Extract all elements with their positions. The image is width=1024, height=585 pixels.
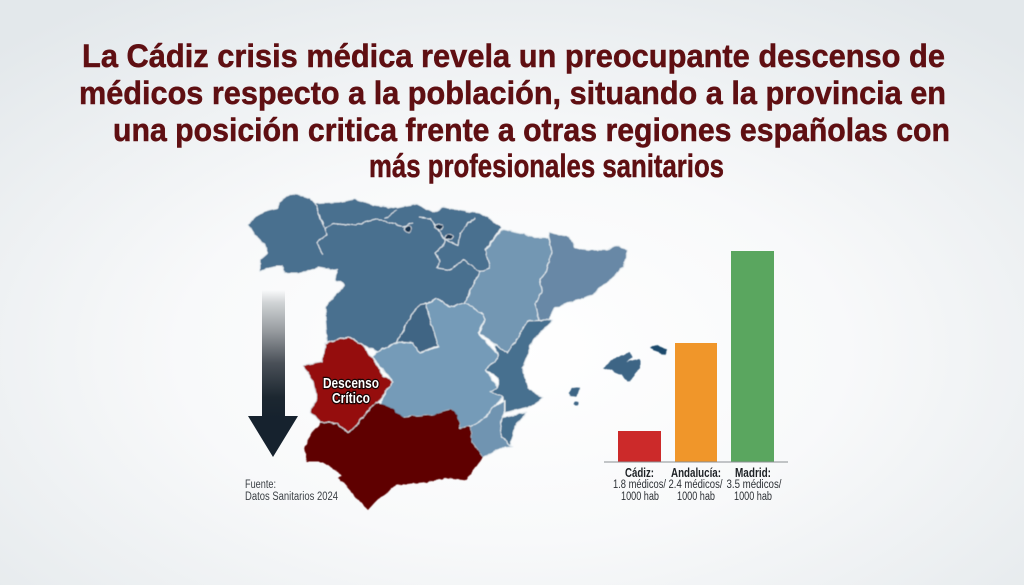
enclave: Álava west [435,224,443,230]
internal borders of the north [315,203,480,272]
label: Andalucía: Andalucía: [671,466,721,480]
label: Andalucía [668,466,723,503]
source note: Datos Sanitarios 2024 [245,491,338,503]
label: Cádiz [613,466,667,503]
title: La Cádiz crisis médica revela un preocupante descenso de [82,38,945,74]
region: Aragón [465,229,552,353]
label: Madrid [726,466,782,503]
small dark enclaves [404,224,454,240]
label: Cádiz: 1.8 médicos/ [613,479,667,491]
map label: Descenso Crítico [323,376,379,407]
region: northern peninsula [248,194,502,352]
arrow: descent [248,290,298,457]
label: Andalucía: 2.4 médicos/ [668,479,723,491]
bar: Cádiz [618,431,661,462]
region: Castilla-La Mancha [372,298,503,428]
islands [568,344,667,406]
baseline [604,462,788,463]
map label: Descenso Crítico: Crítico [332,391,370,407]
region: Valencia [485,320,553,413]
bar: Madrid [731,251,774,462]
label: Cádiz: 1000 hab [621,491,659,503]
label: Andalucía: 1000 hab [677,491,715,503]
label: Madrid: 1000 hab [734,491,772,503]
island: Menorca [650,344,667,356]
region: Cataluña [535,232,628,322]
title: médicos respecto a la población, situando a la provincia en [79,75,946,111]
title: más profesionales sanitarios [369,148,724,184]
source note [245,479,338,503]
bar chart [604,251,788,503]
label: Madrid: Madrid: [735,466,771,480]
region: Extremadura [303,337,393,433]
title [79,38,950,184]
enclave: Álava east [444,234,454,240]
enclave: Treviño [404,226,412,232]
region: Alicante [500,412,527,445]
island: Mallorca [603,352,640,381]
label: Cádiz: Cádiz: [625,466,654,480]
title: una posición critica frente a otras regiones españolas con [113,112,950,148]
source note: Fuente: [245,479,276,491]
island: Formentera [574,402,578,406]
region: Andalucía [304,402,483,510]
map of Spain [248,194,628,510]
island: Ibiza [568,387,580,397]
label: Madrid: 3.5 médicos/ [726,479,782,491]
bar: Andalucía [675,343,717,462]
region: Murcia [470,400,512,457]
map label: Descenso Crítico: Descenso [323,376,379,392]
region: Madrid [397,303,438,353]
